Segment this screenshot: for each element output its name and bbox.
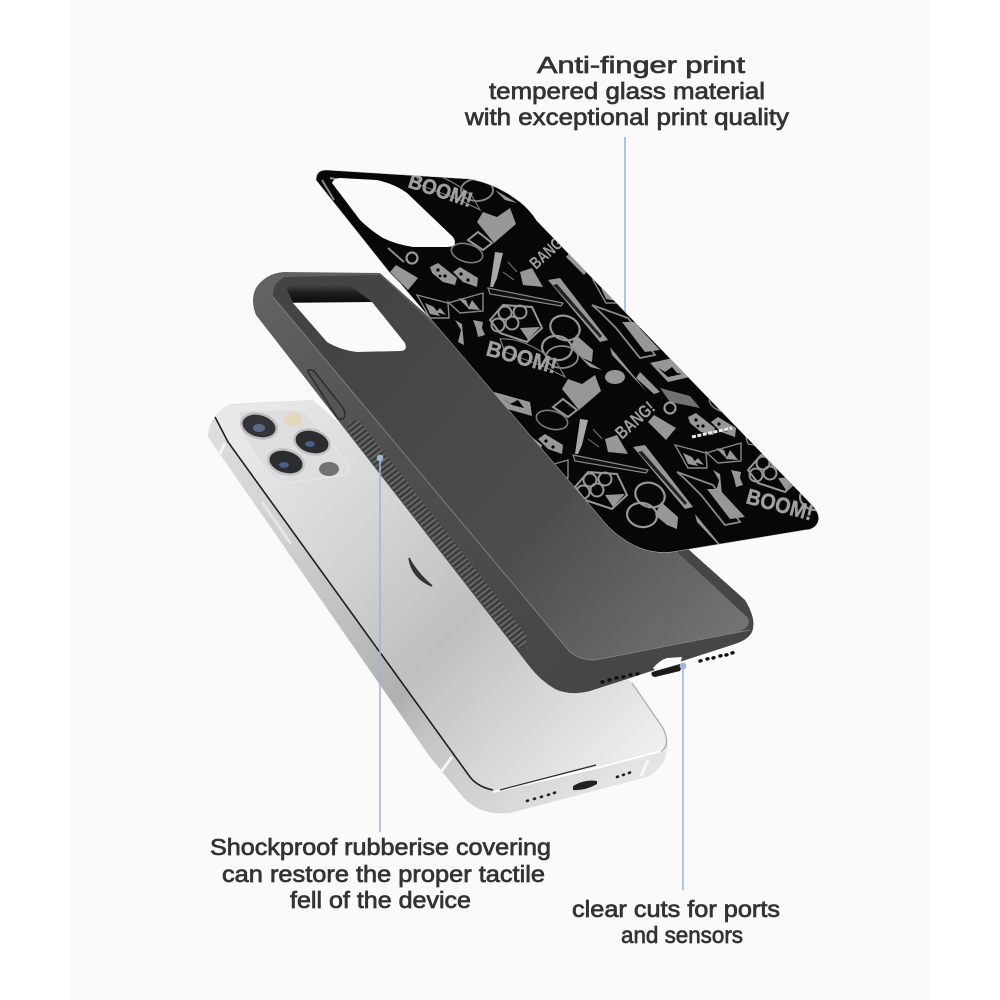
text: clear cuts: clear cuts for ports xyxy=(572,896,780,922)
text: shockproof covering: can restore the proper tactile xyxy=(222,861,545,887)
text: clear cuts: and sensors xyxy=(621,922,743,948)
callout line: rubberised covering xyxy=(377,455,383,832)
comic doodle print xyxy=(321,175,816,544)
phone: silver device xyxy=(208,400,668,813)
BOOM lettering xyxy=(405,170,816,525)
camera cut-out xyxy=(287,283,406,352)
BANG lettering: BANG! xyxy=(611,397,659,443)
charging port xyxy=(651,657,682,677)
glass camera hole xyxy=(332,178,455,247)
phone side frame xyxy=(208,400,668,813)
text: shockproof covering: Shockproof rubberise covering xyxy=(210,834,551,860)
text: glass material xyxy=(464,52,790,130)
text: glass material: with exceptional print quality xyxy=(464,104,790,130)
text: shockproof covering xyxy=(210,834,551,913)
BANG lettering: BANG! xyxy=(526,231,570,273)
maker mark xyxy=(692,428,732,437)
text: shockproof covering: fell of the device xyxy=(290,887,471,913)
case inner floor xyxy=(273,275,749,660)
callout line: glass xyxy=(624,137,626,312)
speaker holes xyxy=(602,653,733,682)
BOOM lettering: BOOM! xyxy=(484,336,560,378)
BANG lettering xyxy=(526,231,659,443)
text: glass material: tempered glass material xyxy=(489,78,765,104)
text: clear cuts xyxy=(572,896,780,948)
bottom port details xyxy=(527,773,630,801)
razor blades xyxy=(322,178,700,416)
side button xyxy=(308,370,345,419)
text: glass material: Anti-finger print xyxy=(537,52,746,78)
logo crescent xyxy=(409,558,432,586)
camera module xyxy=(238,410,349,482)
BOOM lettering: BOOM! xyxy=(744,484,816,525)
case shell xyxy=(253,272,753,693)
BOOM lettering: BOOM! xyxy=(405,170,475,212)
protective case xyxy=(253,272,753,693)
callout line: ports xyxy=(680,663,686,890)
phone back glass xyxy=(215,400,666,790)
grip strip xyxy=(347,421,526,648)
tempered glass back panel xyxy=(316,170,819,553)
